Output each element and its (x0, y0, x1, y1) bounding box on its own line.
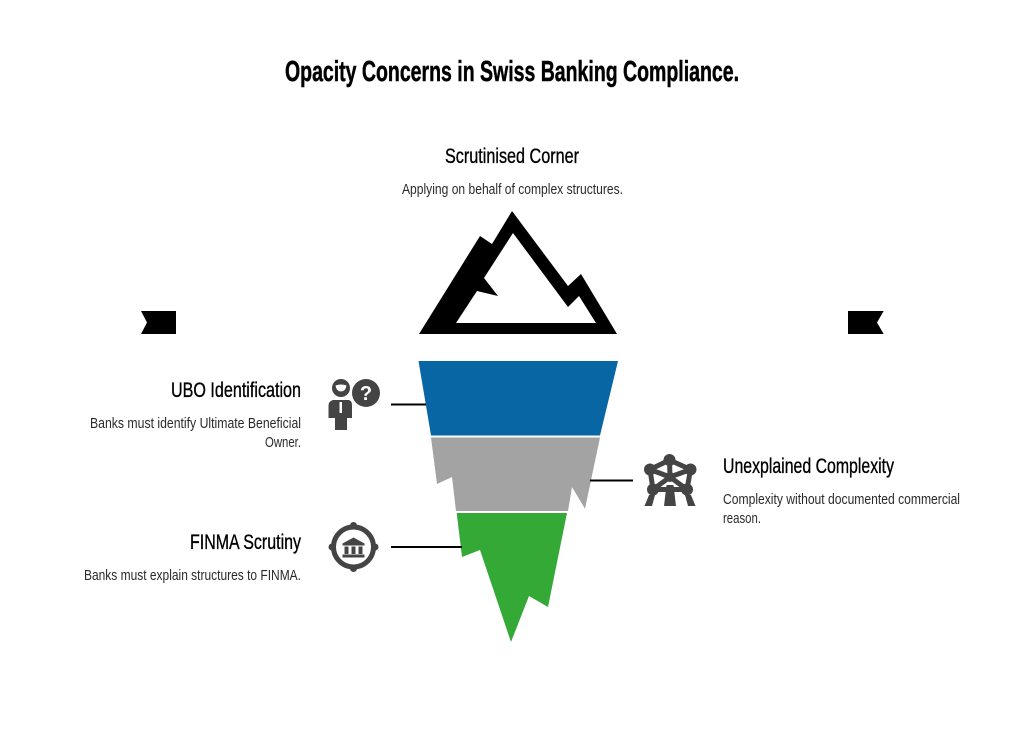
text: FINMA description: Banks must explain structures to FINMA. (84, 567, 301, 584)
iceberg (418, 361, 618, 642)
iceberg layer: gray (431, 438, 600, 511)
heading: scrutinised corner: Scrutinised Corner (445, 145, 579, 168)
left waterline flag (141, 311, 176, 334)
icon: person with question mark (328, 379, 380, 430)
text: complexity description (723, 491, 960, 527)
iceberg layer: blue (418, 361, 618, 436)
title: Opacity Concerns in Swiss Banking Compliance. (285, 56, 739, 88)
text: UBO description (90, 415, 301, 451)
iceberg layer: green (457, 513, 567, 642)
icon: bank in target (328, 522, 378, 572)
heading: unexplained complexity: Unexplained Complexity (723, 455, 894, 478)
text: UBO description: Owner. (265, 434, 301, 451)
text: complexity description: Complexity without documented commercial (723, 491, 960, 508)
heading: FINMA scrutiny: FINMA Scrutiny (190, 531, 301, 554)
connector: UBO identification (391, 404, 426, 406)
icon: person with question mark: ? (360, 383, 372, 405)
panel: FINMA scrutiny (84, 531, 301, 584)
panel: scrutinised corner text (402, 145, 623, 198)
text: complexity description: reason. (723, 510, 761, 527)
right waterline flag (848, 311, 884, 334)
icon: mountain peak (419, 211, 617, 334)
text: UBO description: Banks must identify Ultimate Beneficial (90, 415, 301, 432)
panel: unexplained complexity (723, 455, 960, 527)
icon: atomium (644, 454, 696, 506)
connector: unexplained complexity (590, 480, 633, 482)
text: scrutinised corner description: Applying on behalf of complex structures. (402, 181, 623, 198)
panel: UBO identification (90, 379, 301, 451)
connector: FINMA scrutiny (391, 546, 462, 548)
heading: UBO identification: UBO Identification (171, 379, 301, 402)
